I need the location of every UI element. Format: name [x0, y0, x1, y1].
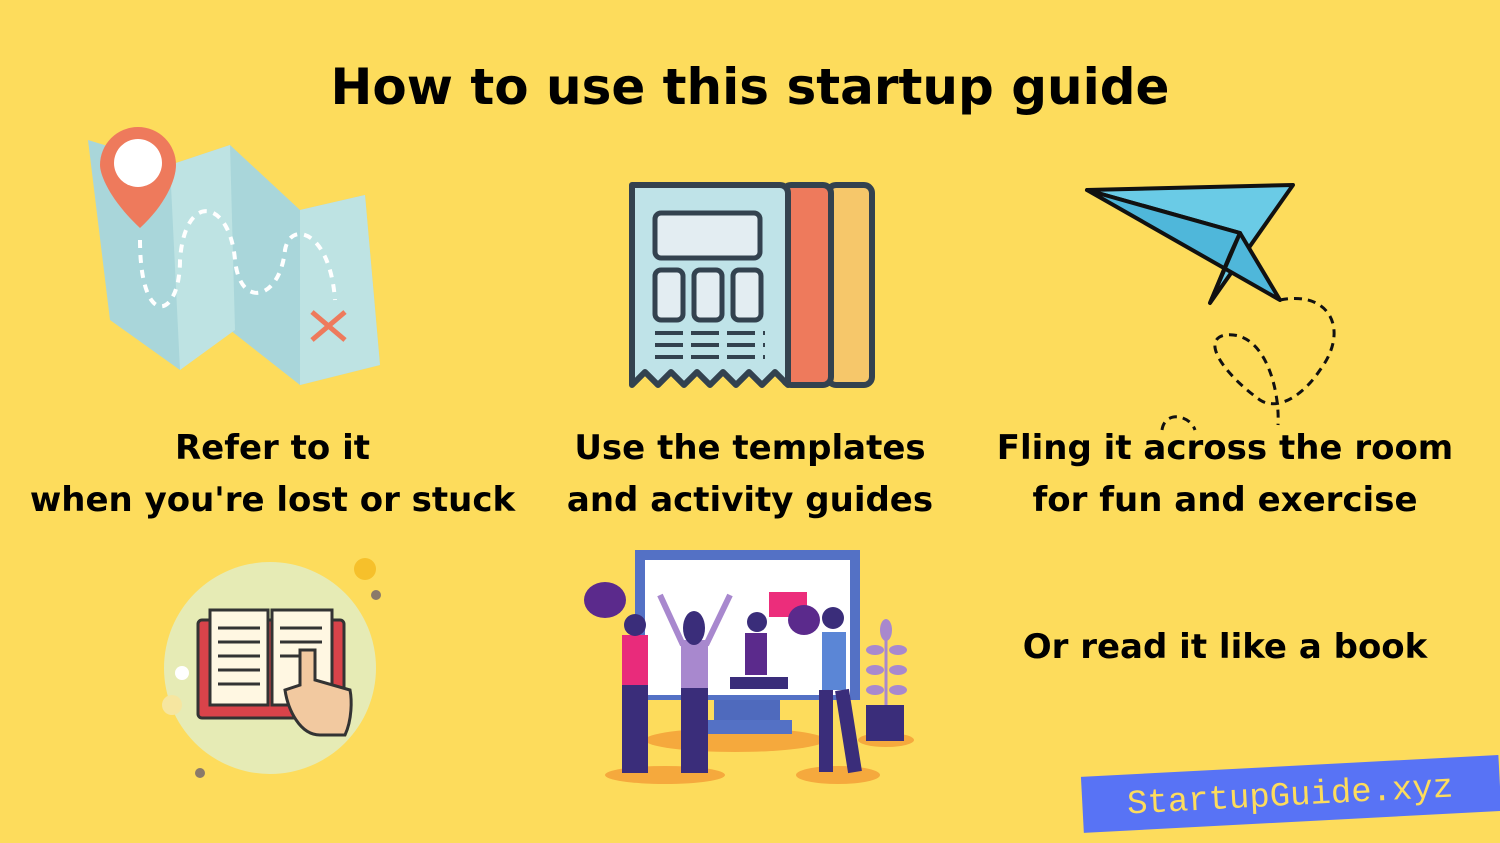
logo: StartupGuide.xyz: [1081, 755, 1500, 833]
icon: templates: [632, 185, 872, 385]
text: templates: [567, 428, 933, 520]
icon: paper plane: [1087, 185, 1334, 430]
text: book: Or read it like a book: [1023, 627, 1427, 667]
text: fling: [997, 428, 1453, 520]
icon: map: [88, 127, 380, 385]
text: refer: when you're lost or stuck: [30, 480, 515, 520]
icon: people at screen: [584, 550, 914, 784]
text: templates: Use the templates: [574, 428, 926, 468]
text: templates: and activity guides: [567, 480, 933, 520]
title: How to use this startup guide: [331, 58, 1169, 116]
text: fling: for fun and exercise: [1032, 480, 1418, 520]
text: fling: Fling it across the room: [997, 428, 1453, 468]
text: refer: [30, 428, 516, 520]
icon: open book: [162, 558, 381, 778]
logo: StartupGuide.xyz: StartupGuide.xyz: [1126, 769, 1454, 825]
text: refer: Refer to it: [175, 428, 370, 468]
